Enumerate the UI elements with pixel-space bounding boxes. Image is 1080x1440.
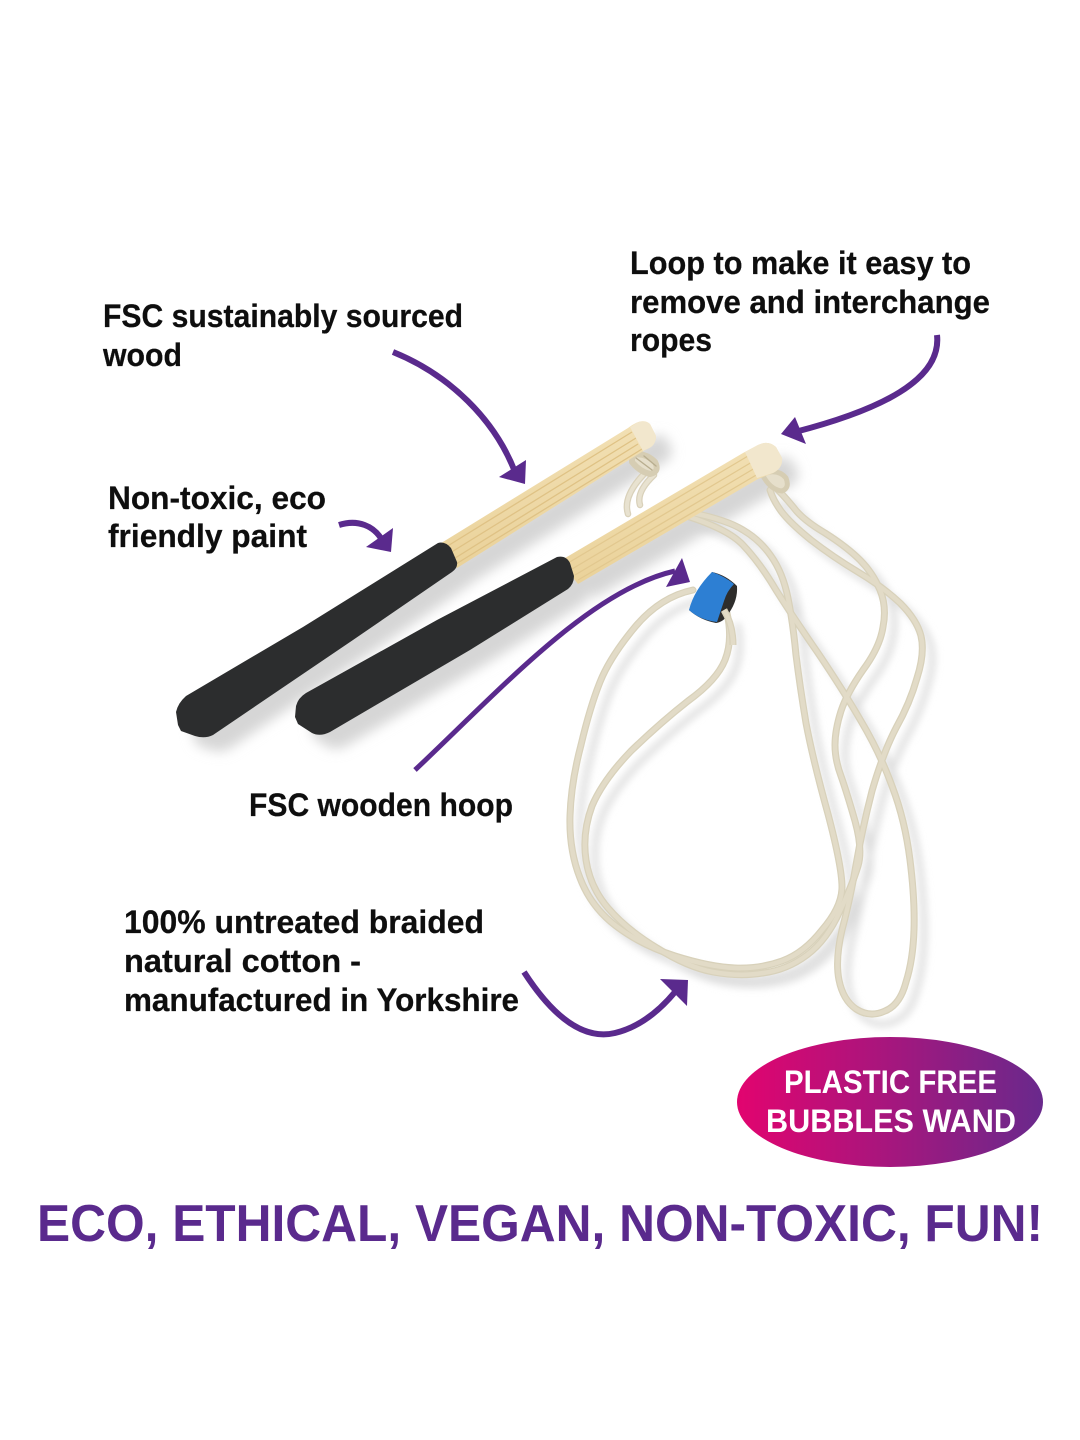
callout: braided cotton: 100% untreated braided (124, 904, 484, 940)
callout: FSC sustainably sourced wood: wood (102, 337, 182, 373)
front handle foam grip (295, 557, 574, 735)
callout: non-toxic paint: friendly paint (108, 518, 307, 554)
blue ring bead (689, 572, 737, 645)
back handle rope loop and knot (627, 454, 657, 514)
arrow: to grip (339, 523, 393, 552)
callout: FSC sustainably sourced wood (102, 298, 463, 373)
front handle knot (762, 472, 787, 491)
front handle wood (560, 443, 782, 584)
ropes (570, 490, 922, 1014)
back handle wood (438, 421, 656, 568)
callout: FSC sustainably sourced wood: FSC sustainably sourced (103, 298, 463, 334)
arrow: to rope (524, 972, 688, 1034)
callout: braided cotton: manufactured in Yorkshire (124, 982, 519, 1018)
badge: plastic free bubbles wand: BUBBLES WAND (766, 1103, 1016, 1139)
badge: plastic free bubbles wand (737, 1037, 1043, 1167)
callout: loop (630, 245, 990, 358)
callout: loop: remove and interchange (630, 284, 990, 320)
callout: braided cotton: natural cotton - (124, 943, 361, 979)
back handle foam grip (176, 543, 457, 737)
callout: loop: ropes (630, 322, 712, 358)
tagline: ECO, ETHICAL, VEGAN, NON-TOXIC, FUN! (37, 1195, 1043, 1253)
rope shadows (580, 500, 932, 1024)
callout: non-toxic paint (108, 480, 326, 554)
callout: loop: Loop to make it easy to (630, 245, 971, 281)
product: bubble wand handles and ropes (176, 421, 932, 1024)
arrow: to loop (781, 335, 937, 444)
callout: non-toxic paint: Non-toxic, eco (108, 480, 326, 516)
callout: FSC wooden hoop: FSC wooden hoop (249, 787, 513, 823)
handle shadows (192, 435, 798, 751)
arrow: to hoop (415, 558, 690, 770)
arrow: to wooden handle (393, 352, 526, 484)
callout: braided cotton (124, 904, 519, 1018)
badge: plastic free bubbles wand: PLASTIC FREE (784, 1064, 997, 1100)
